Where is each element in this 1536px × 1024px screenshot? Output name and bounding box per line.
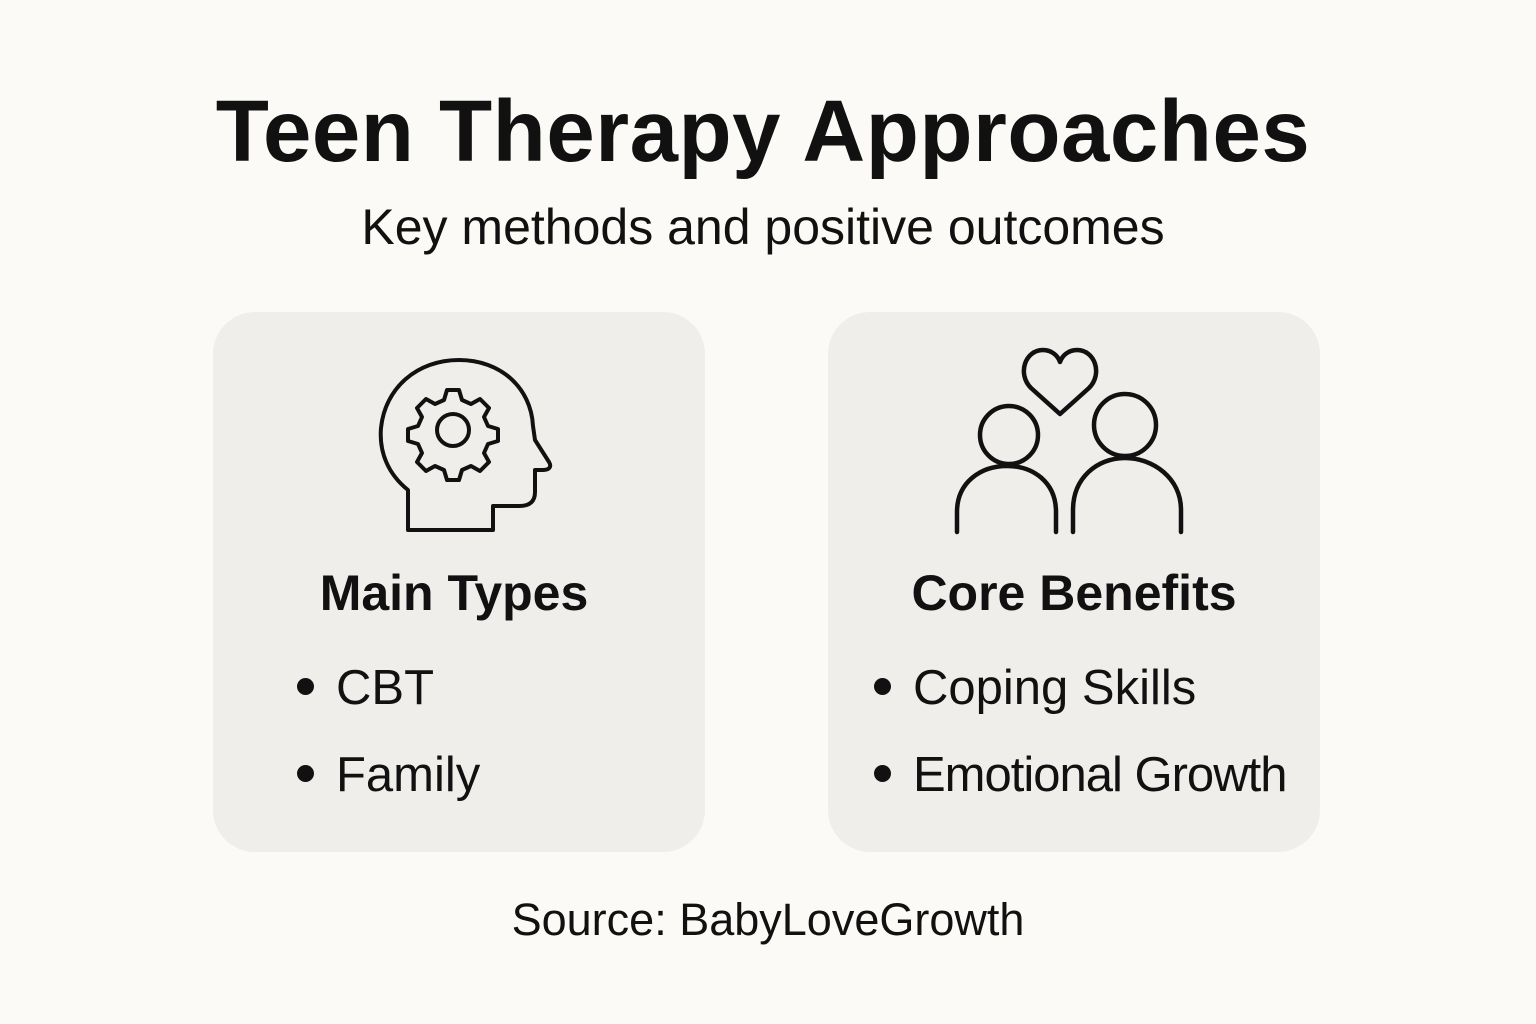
title: Teen Therapy Approaches bbox=[216, 83, 1310, 180]
source: Source: BabyLoveGrowth bbox=[512, 894, 1024, 945]
heading: main types: Main Types bbox=[320, 565, 588, 621]
icon: head with gear bbox=[378, 358, 552, 532]
panel: main types: Family bbox=[336, 748, 480, 802]
heading: core benefits: Core Benefits bbox=[911, 565, 1237, 621]
panel: main types: CBT bbox=[336, 661, 434, 715]
panel: core benefits bbox=[828, 312, 1320, 852]
list: core benefits bbox=[874, 661, 1286, 802]
panel: core benefits: Coping Skills bbox=[913, 661, 1196, 715]
subtitle: Key methods and positive outcomes bbox=[361, 199, 1165, 255]
icon: two people with heart bbox=[954, 348, 1184, 534]
list: main types bbox=[297, 661, 480, 802]
panel: core benefits: Emotional Growth bbox=[913, 748, 1286, 802]
panel: main types bbox=[213, 312, 705, 852]
